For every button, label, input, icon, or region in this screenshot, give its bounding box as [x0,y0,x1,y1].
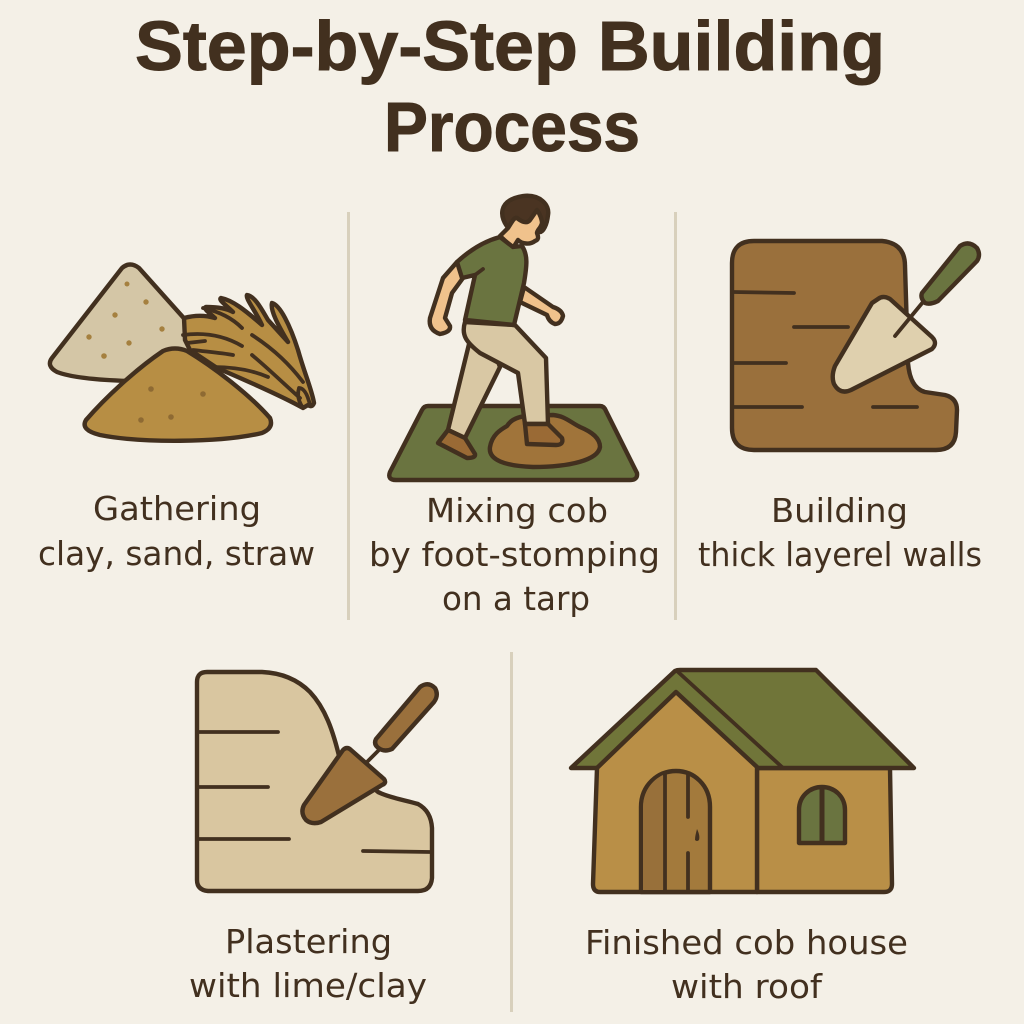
icon: sand pile [50,264,190,381]
caption: by foot-stomping [369,535,660,574]
back leg [448,340,500,438]
caption: Building [771,491,908,530]
caption: Finished cob house [585,923,908,962]
caption: on a tarp [442,579,590,618]
caption [189,922,427,1005]
caption: with lime/clay [189,966,427,1005]
panel: step 1 gathering [38,264,315,573]
caption: Gathering [93,489,261,528]
caption [369,491,660,618]
icon: window [799,787,845,843]
icon: trowel [302,684,437,823]
icon: cob wall [732,241,957,450]
panel: step 3 walls [698,241,982,574]
icon: roof [571,670,914,768]
front leg [464,322,548,424]
icon: door [641,771,710,892]
icon: straw bundle [183,295,314,408]
caption: clay, sand, straw [38,534,315,573]
icon: cob mound [490,415,600,467]
arms [520,287,563,324]
caption: with roof [671,967,823,1006]
title: Process [384,88,640,166]
icon: plaster wall [197,672,432,891]
panel: step 2 mixing [369,196,660,618]
title: Step-by-Step Building [135,7,885,85]
icon: trowel [833,243,979,392]
icon: clay pile [85,348,271,441]
icon: tarp [389,406,637,480]
caption: thick layerel walls [698,535,982,574]
icon: side wall [757,768,892,892]
panel: step 5 finished house [571,670,914,1006]
caption: Plastering [225,922,392,961]
panel: step 4 plastering [189,672,437,1005]
caption: Mixing cob [426,491,608,530]
caption [38,489,315,573]
wall layer lines [733,292,917,407]
caption [585,923,908,1006]
icon: front gable [593,692,757,892]
icon: person stomping [430,196,563,458]
head [502,196,548,232]
plaster lines [198,732,430,852]
caption [698,491,982,574]
shirt [457,237,526,325]
title [135,7,885,166]
